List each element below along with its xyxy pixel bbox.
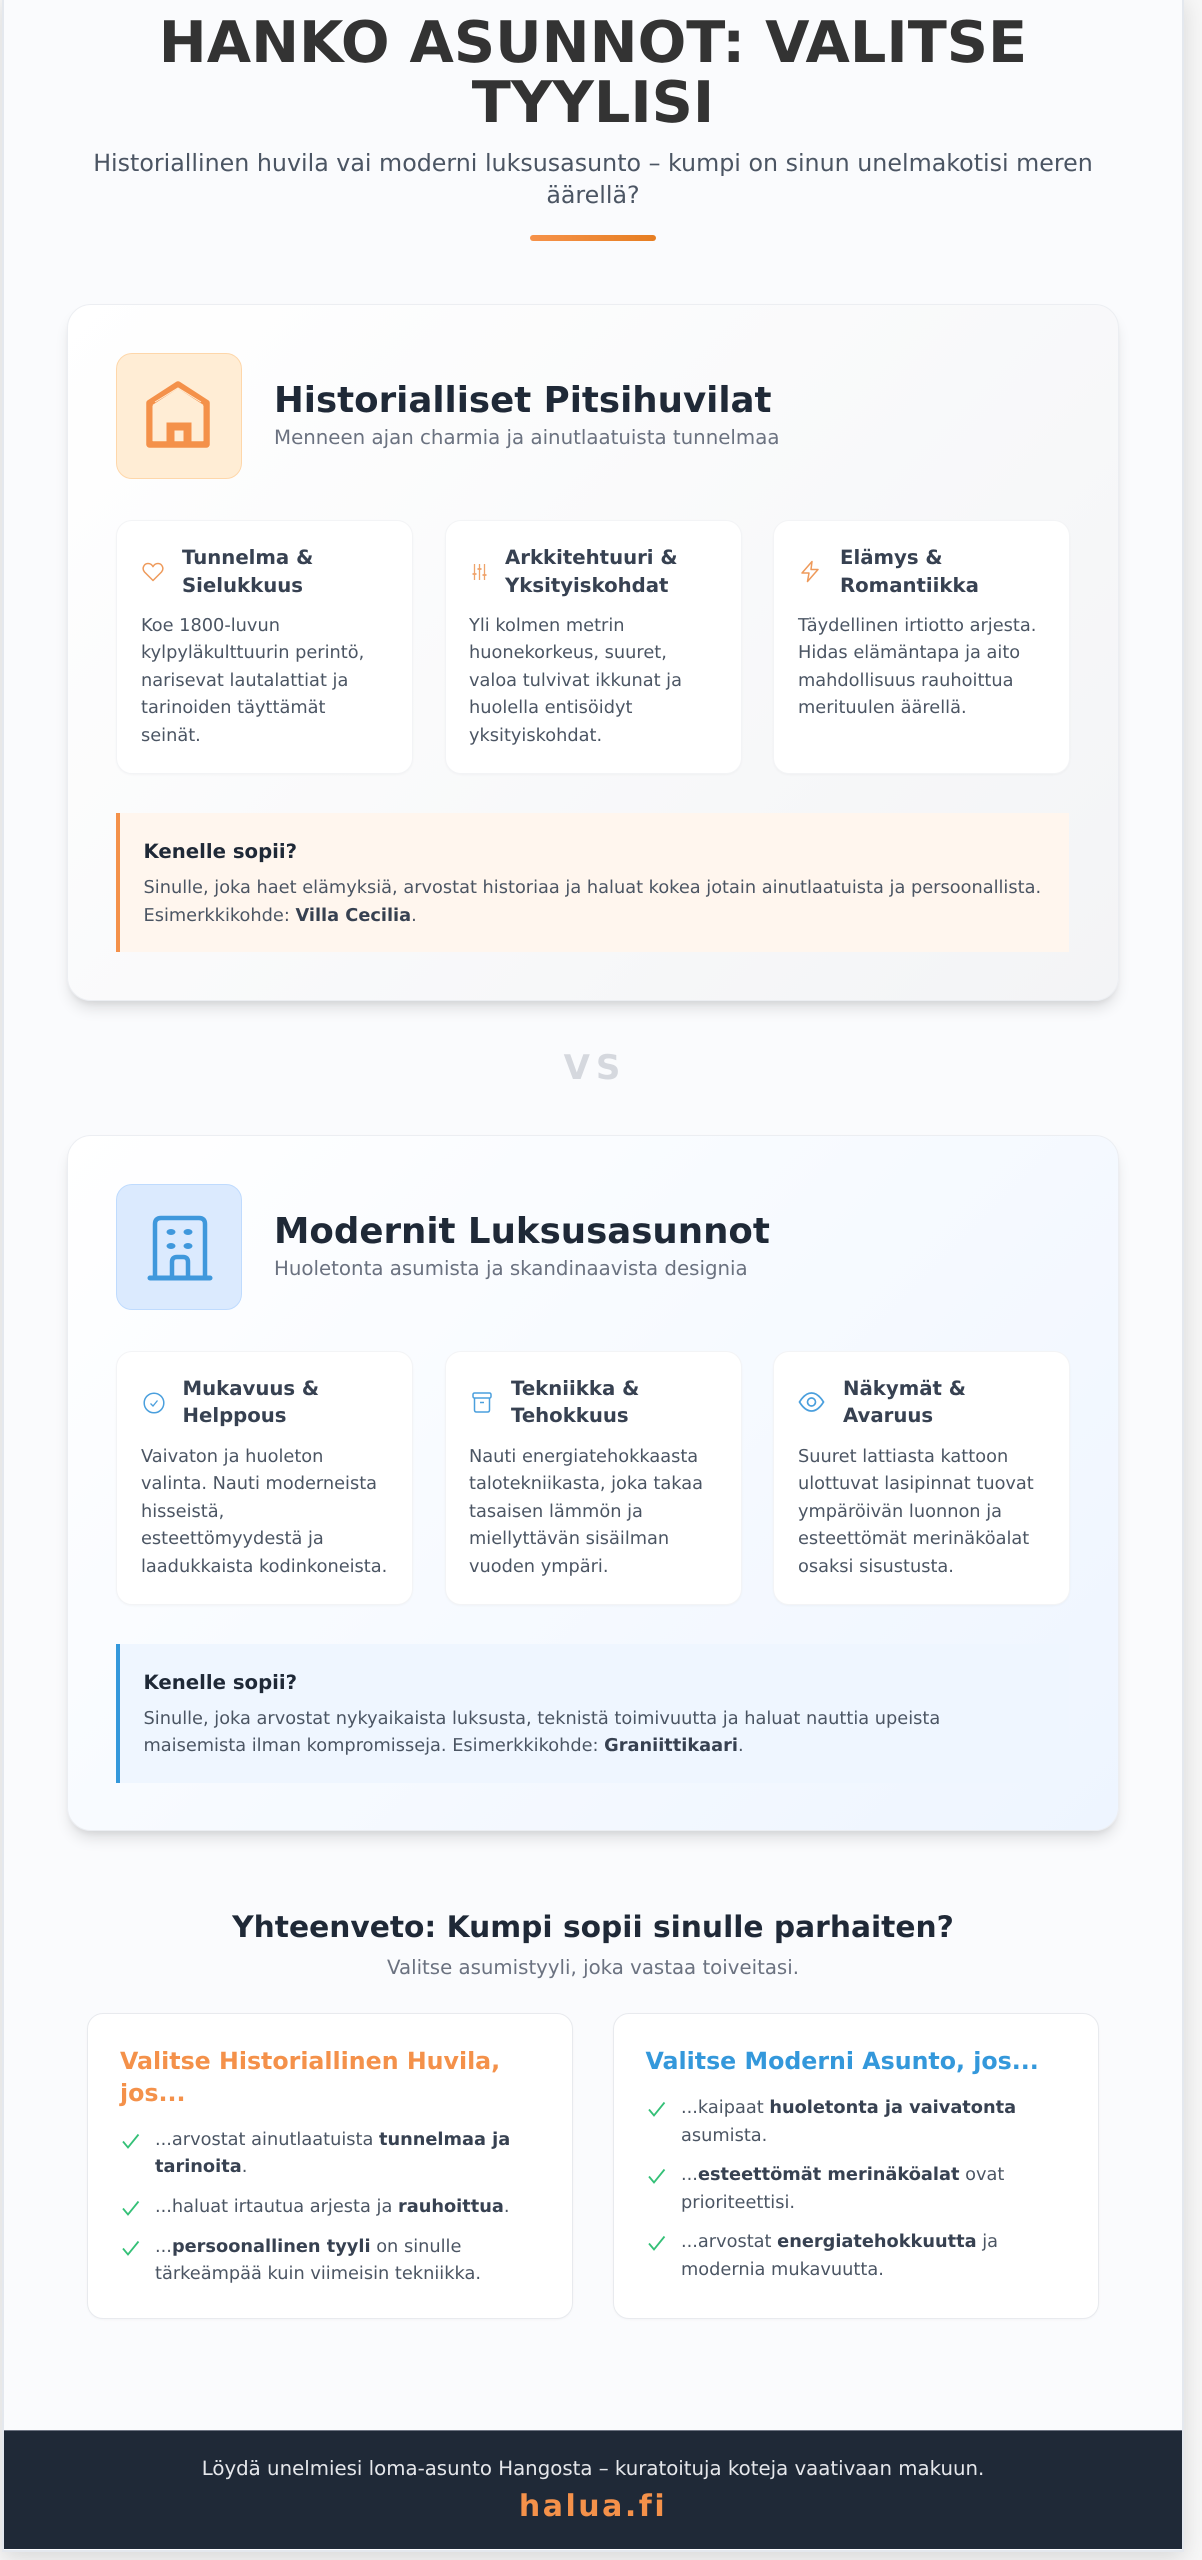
feature text: views: esteettömät merinäköalat xyxy=(798,1529,1029,1549)
list item: ...arvostat ainutlaatuista tunnelmaa ja xyxy=(155,2130,510,2150)
vs label: VS xyxy=(564,1048,626,1088)
feature heading: architecture: Arkkitehtuuri & xyxy=(505,546,678,569)
feature text: experience: mahdollisuus rauhoittua xyxy=(798,671,1014,691)
feature text: technology: tasaisen lämmön ja xyxy=(469,1502,643,1522)
list item xyxy=(681,2098,1016,2146)
footer logo: halua.fi xyxy=(519,2489,667,2524)
feature heading: comfort: Helppous xyxy=(182,1404,287,1427)
check icon xyxy=(122,2240,140,2256)
accent divider xyxy=(530,235,656,241)
feature text: technology: vuoden ympäri. xyxy=(469,1557,609,1577)
feature text: architecture: yksityiskohdat. xyxy=(469,726,602,746)
icon: bolt xyxy=(801,560,819,582)
icon: house xyxy=(116,353,242,479)
list item: ...persoonallinen tyyli on sinulle xyxy=(155,2236,461,2256)
feature text: technology: miellyttävän sisäilman xyxy=(469,1529,669,1549)
heading: historical villas: Historialliset Pitsihuvilat xyxy=(274,380,772,421)
feature text: technology: talotekniikasta, joka takaa xyxy=(469,1474,703,1494)
feature text: atmosphere: Koe 1800-luvun xyxy=(141,616,280,636)
feature text: experience: Hidas elämäntapa ja aito xyxy=(798,643,1020,663)
summary card heading: villa: Valitse Historiallinen Huvila, xyxy=(120,2047,500,2075)
footer text: Löydä unelmiesi loma-asunto Hangosta – kuratoituja koteja vaativaan makuun. xyxy=(202,2457,984,2480)
panel: modern apartments xyxy=(67,1134,1119,1831)
icon: eye xyxy=(798,1392,824,1412)
feature text: views xyxy=(798,1446,1034,1577)
feature heading: experience xyxy=(840,546,979,597)
check icon xyxy=(648,2102,666,2117)
callout heading: modern: Kenelle sopii? xyxy=(144,1670,297,1694)
feature text: views: Suuret lattiasta kattoon xyxy=(798,1446,1008,1466)
feature heading: technology: Tehokkuus xyxy=(511,1404,629,1427)
feature text: architecture: Yli kolmen metrin xyxy=(469,616,625,636)
feature text: technology xyxy=(469,1446,703,1577)
callout text: historical xyxy=(144,878,1041,926)
title xyxy=(159,9,1027,136)
feature text: architecture xyxy=(469,616,682,746)
feature heading: atmosphere xyxy=(182,546,313,597)
feature heading: experience: Elämys & xyxy=(840,546,943,569)
callout text: modern xyxy=(144,1708,940,1756)
callout heading: historical: Kenelle sopii? xyxy=(144,840,297,863)
feature text: technology: Nauti energiatehokkaasta xyxy=(469,1446,698,1466)
summary subheading: Valitse asumistyyli, joka vastaa toiveitasi. xyxy=(387,1956,799,1979)
feature text: experience: merituulen äärellä. xyxy=(798,698,967,718)
list item: modernia mukavuutta. xyxy=(681,2260,884,2280)
feature text: architecture: huolella entisöidyt xyxy=(469,698,632,718)
callout text: modern: maisemista ilman kompromisseja. Esimerkkikohde: Graniittikaari. xyxy=(144,1736,744,1756)
icon: building xyxy=(116,1184,242,1310)
tagline: modern apartments: Huoletonta asumista ja skandinaavista designia xyxy=(274,1256,748,1280)
feature text: views: osaksi sisustusta. xyxy=(798,1557,954,1577)
footer xyxy=(4,2430,1182,2549)
summary card: apartment xyxy=(613,2013,1099,2319)
subtitle: Historiallinen huvila vai moderni luksusasunto – kumpi on sinun unelmakotisi meren xyxy=(93,149,1093,177)
callout text: historical: Sinulle, joka haet elämyksiä, arvostat historiaa ja haluat kokea jotain ainutlaatuista ja persoonallista. xyxy=(144,878,1041,898)
feature text: atmosphere: kylpyläkulttuurin perintö, xyxy=(141,643,364,663)
check icon xyxy=(122,2200,140,2216)
feature heading: atmosphere: Tunnelma & xyxy=(182,546,313,569)
list item xyxy=(681,2232,998,2280)
feature text: atmosphere xyxy=(141,616,364,746)
feature card: atmosphere xyxy=(116,520,413,774)
feature card: comfort xyxy=(116,1350,413,1604)
list item: asumista. xyxy=(681,2126,767,2146)
feature text: atmosphere: tarinoiden täyttämät xyxy=(141,698,325,718)
feature text: comfort xyxy=(141,1446,387,1577)
feature text: comfort: hisseistä, xyxy=(141,1502,224,1522)
feature heading: experience: Romantiikka xyxy=(840,574,979,597)
feature text: experience xyxy=(798,616,1036,718)
feature card: technology xyxy=(445,1350,742,1604)
callout: who it suits, modern xyxy=(116,1644,1069,1782)
feature heading: views: Näkymät & xyxy=(843,1376,966,1400)
heading: modern apartments: Modernit Luksusasunnot xyxy=(274,1211,770,1252)
feature text: comfort: laadukkaista kodinkoneista. xyxy=(141,1557,387,1577)
list item: tarinoita. xyxy=(155,2157,247,2177)
feature text: comfort: Vaivaton ja huoleton xyxy=(141,1446,323,1466)
subtitle xyxy=(93,149,1093,209)
list item xyxy=(155,2130,510,2177)
check icon xyxy=(648,2168,666,2184)
feature heading: atmosphere: Sielukkuus xyxy=(182,574,303,597)
feature text: comfort: esteettömyydestä ja xyxy=(141,1529,324,1549)
summary heading: Yhteenveto: Kumpi sopii sinulle parhaiten? xyxy=(232,1910,954,1945)
list item: ...haluat irtautua arjesta ja rauhoittua. xyxy=(155,2196,510,2216)
list item: ...kaipaat huoletonta ja vaivatonta xyxy=(681,2098,1016,2118)
check icon xyxy=(122,2134,140,2149)
feature heading: technology: Tekniikka & xyxy=(511,1376,639,1400)
feature heading: views xyxy=(843,1376,966,1427)
list item xyxy=(155,2236,481,2284)
check icon xyxy=(648,2236,666,2251)
feature heading: comfort: Mukavuus & xyxy=(182,1376,319,1400)
summary card heading: villa xyxy=(119,2047,500,2107)
feature text: views: ympäröivän luonnon ja xyxy=(798,1502,1002,1522)
list item xyxy=(681,2165,1004,2213)
icon: heart xyxy=(142,562,164,582)
feature text: experience: Täydellinen irtiotto arjesta. xyxy=(798,616,1036,636)
list item: ...esteettömät merinäköalat ovat xyxy=(681,2165,1004,2185)
feature text: architecture: huonekorkeus, suuret, xyxy=(469,643,667,663)
feature text: atmosphere: narisevat lautalattiat ja xyxy=(141,671,348,691)
callout: who it suits, historical xyxy=(116,813,1069,952)
feature card: experience xyxy=(773,520,1070,774)
summary card: villa xyxy=(87,2013,573,2319)
summary card heading: apartment: Valitse Moderni Asunto, jos... xyxy=(646,2047,1039,2075)
icon: archive box xyxy=(472,1392,492,1413)
feature heading: technology xyxy=(511,1376,639,1427)
callout text: historical: Esimerkkikohde: Villa Cecilia. xyxy=(144,906,417,926)
callout text: modern: Sinulle, joka arvostat nykyaikaista luksusta, teknistä toimivuutta ja haluat nauttia upeista xyxy=(144,1708,940,1728)
feature text: atmosphere: seinät. xyxy=(141,726,201,746)
feature card: architecture xyxy=(445,520,742,774)
feature card: views xyxy=(773,1350,1070,1604)
summary card heading: villa: jos... xyxy=(120,2079,186,2107)
tagline: historical villas: Menneen ajan charmia ja ainutlaatuista tunnelmaa xyxy=(274,426,779,449)
list item: ...arvostat energiatehokkuutta ja xyxy=(681,2232,998,2252)
panel: historical villas xyxy=(67,304,1119,1000)
title: HANKO ASUNNOT: VALITSE xyxy=(159,9,1027,76)
feature heading: architecture xyxy=(504,546,678,597)
subtitle: äärellä? xyxy=(546,181,640,209)
title: TYYLISI xyxy=(472,69,714,136)
list item: prioriteettisi. xyxy=(681,2193,795,2213)
feature text: architecture: valoa tulvivat ikkunat ja xyxy=(469,671,682,691)
feature heading: views: Avaruus xyxy=(843,1404,933,1427)
icon: sliders xyxy=(472,564,486,580)
feature text: comfort: valinta. Nauti moderneista xyxy=(141,1474,377,1494)
feature text: views: ulottuvat lasipinnat tuovat xyxy=(798,1474,1034,1494)
list item: tärkeämpää kuin viimeisin tekniikka. xyxy=(155,2264,481,2284)
icon: check circle xyxy=(143,1392,165,1414)
feature heading: comfort xyxy=(182,1376,319,1427)
feature heading: architecture: Yksityiskohdat xyxy=(505,574,668,597)
